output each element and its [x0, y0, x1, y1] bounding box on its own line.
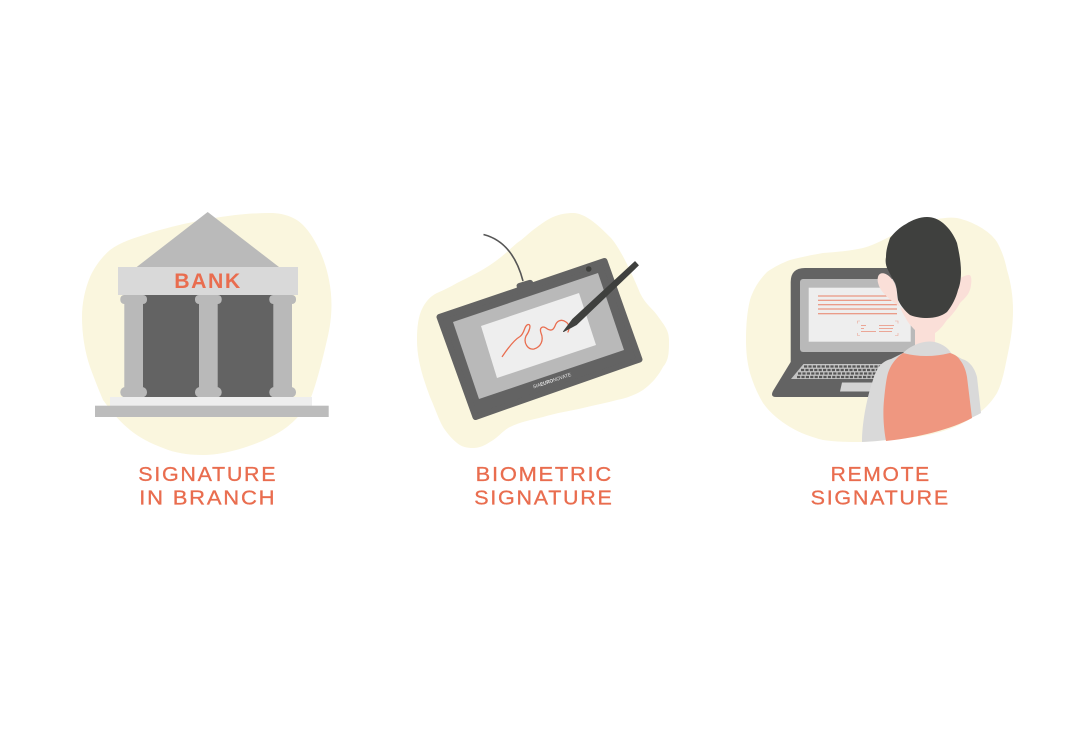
icon: laptop	[772, 268, 918, 397]
background blob: person	[746, 218, 1013, 442]
label: remote signature: SIGNATURE	[811, 488, 950, 510]
icon: signature tablet	[440, 234, 640, 417]
document signature block	[858, 321, 898, 336]
laptop document	[809, 288, 911, 342]
label: signature in branch: IN BRANCH	[139, 488, 276, 510]
label: biometric signature: SIGNATURE	[474, 488, 614, 510]
person hair	[886, 217, 961, 318]
laptop touchpad	[840, 382, 875, 392]
panel: remote signature	[746, 217, 1013, 510]
document lines	[818, 296, 897, 314]
background blob: bank	[82, 213, 331, 455]
background blob: tablet	[417, 213, 669, 448]
bank entablature	[118, 267, 298, 295]
icon: bank building	[95, 212, 329, 417]
panel: signature in branch	[82, 212, 331, 510]
tablet body	[440, 261, 640, 417]
bank door wall	[143, 295, 274, 398]
tablet paper area	[481, 293, 596, 378]
bank pediment	[137, 212, 279, 267]
person jacket	[862, 342, 981, 442]
stylus pen	[564, 262, 638, 332]
bank sign text: BANK	[174, 270, 242, 293]
bank columns	[120, 295, 296, 398]
laptop screen bezel	[800, 279, 915, 352]
tablet camera	[586, 266, 592, 272]
bank upper step	[110, 397, 312, 406]
tablet screen	[453, 273, 624, 399]
label: remote signature	[811, 464, 950, 510]
label: signature in branch: SIGNATURE	[138, 464, 277, 486]
handwritten signature	[502, 320, 569, 356]
laptop base	[772, 362, 905, 397]
label: remote signature: REMOTE	[831, 464, 931, 486]
label: biometric signature	[474, 464, 614, 510]
bank lower step	[95, 406, 329, 417]
person ears, face and neck	[878, 273, 971, 346]
label: biometric signature: BIOMETRIC	[476, 464, 613, 486]
laptop lid	[791, 268, 918, 364]
label: signature in branch	[138, 464, 277, 510]
person vest	[883, 353, 972, 441]
tablet cable	[484, 234, 523, 281]
tablet connector	[516, 280, 534, 288]
tablet brand text: SIAEURONOVATE	[532, 372, 573, 390]
panel: biometric signature	[417, 213, 669, 510]
icon: person from behind	[862, 217, 981, 442]
laptop keyboard	[791, 364, 885, 379]
